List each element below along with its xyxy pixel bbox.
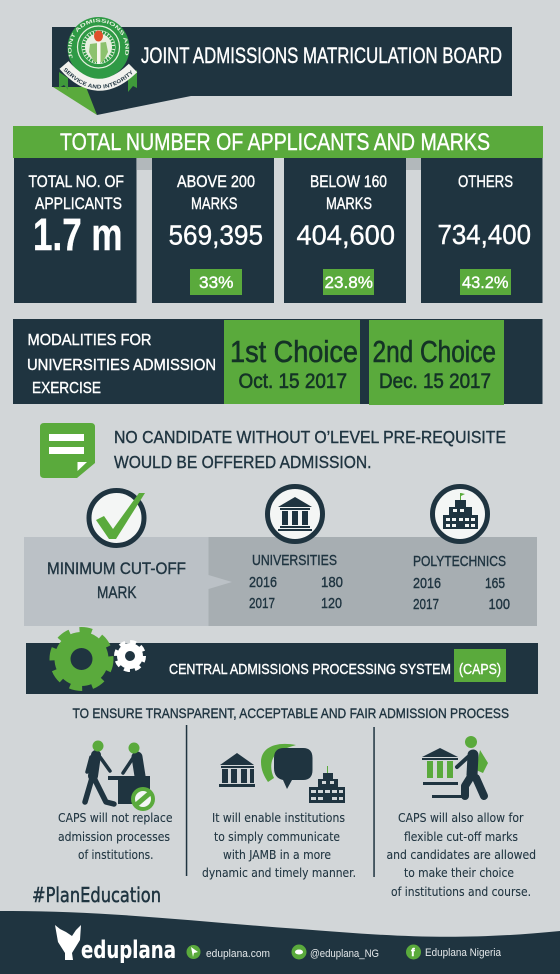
text: flexible cut-off marks: of institutions and course. <box>391 885 531 899</box>
cut-off label: MINIMUM CUT-OFF <box>47 560 186 578</box>
icon: people at desk <box>85 740 155 811</box>
icon: JAMB logo: SERVICE AND INTEGRITY <box>64 68 132 88</box>
first choice: 1st Choice <box>230 334 358 369</box>
icon: eduplana bulb <box>55 925 81 960</box>
panel: minimum cut-off mark <box>24 537 537 626</box>
text: CAPS will not replace: CAPS will not replace <box>58 811 172 825</box>
website: eduplana.com <box>206 948 270 960</box>
icon: JAMB logo <box>59 17 138 92</box>
stat: above 200 marks: ABOVE 200 <box>177 173 255 191</box>
stat: below 160 marks: 404,600 <box>296 220 395 250</box>
CAPS heading: CENTRAL ADMISSIONS PROCESSING SYSTEM <box>169 662 451 678</box>
panel: total number of applicants and marks <box>13 126 543 303</box>
icon: student and institution <box>422 736 488 798</box>
universities marks <box>249 553 343 612</box>
notice text: NO CANDIDATE WITHOUT O’LEVEL PRE-REQUISITE <box>114 427 506 447</box>
icon: university <box>268 486 322 542</box>
stat: above 200 marks: 569,395 <box>168 220 263 250</box>
universities marks: 180 <box>321 575 343 591</box>
universities marks: 2016 <box>249 575 277 591</box>
stat: others: OTHERS <box>458 173 513 191</box>
stat: total applicants: TOTAL NO. OF <box>28 173 124 191</box>
text: enable institutions: to simply communicate <box>214 830 340 844</box>
facebook: f <box>411 947 415 959</box>
facebook <box>406 944 502 960</box>
speech bubbles <box>261 744 312 789</box>
text: enable institutions: dynamic and timely manner. <box>202 866 356 880</box>
icon: polytechnic <box>432 486 488 542</box>
polytechnics marks: 2017 <box>413 597 439 613</box>
modalities text: UNIVERSITIES ADMISSION <box>27 357 216 374</box>
icon: green gear <box>52 630 110 688</box>
stat: above 200 marks: MARKS <box>191 195 238 213</box>
text: enable institutions: with JAMB in a more <box>223 848 331 862</box>
stat: below 160 marks: 23.8% <box>324 273 373 292</box>
text: flexible cut-off marks: to make their choice <box>404 866 514 880</box>
notice text: WOULD BE OFFERED ADMISSION. <box>114 452 372 472</box>
school <box>309 766 345 803</box>
polytechnics marks: 100 <box>488 597 510 613</box>
cut-off label: MARK <box>97 584 136 602</box>
modalities text <box>27 332 216 397</box>
twitter: @eduplana_NG <box>310 948 379 960</box>
icon: check mark <box>89 490 145 546</box>
stat: below 160 marks <box>284 158 406 303</box>
icon: note <box>40 423 95 478</box>
stat: others: 734,400 <box>438 219 531 250</box>
hashtag: #PlanEducation <box>32 883 161 907</box>
stat: above 200 marks <box>152 158 274 303</box>
stat: others <box>421 158 542 303</box>
text: flexible cut-off marks: and candidates are allowed <box>386 848 536 862</box>
stat: above 200 marks: 33% <box>199 273 234 292</box>
text: CAPS will not replace: of institutions. <box>78 848 154 862</box>
stat: below 160 marks: BELOW 160 <box>310 173 387 191</box>
text: CAPS will not replace: admission processes <box>58 830 170 844</box>
universities marks: 2017 <box>249 596 275 612</box>
universities marks: UNIVERSITIES <box>252 553 337 569</box>
eduplana wordmark: eduplana <box>81 936 176 964</box>
CAPS badge <box>454 649 506 682</box>
polytechnics marks: 165 <box>485 576 505 592</box>
footer <box>0 911 560 974</box>
first choice: Oct. 15 2017 <box>238 370 347 393</box>
text: CAPS will not replace <box>58 811 172 862</box>
cut-off label <box>47 560 186 602</box>
icon: communication <box>219 744 345 803</box>
stat: total applicants: APPLICANTS <box>35 195 122 213</box>
text: flexible cut-off marks: flexible cut-off marks <box>404 830 518 844</box>
website <box>186 945 270 960</box>
CAPS badge: (CAPS) <box>459 661 501 678</box>
polytechnics marks: POLYTECHNICS <box>413 554 506 570</box>
polytechnics marks: 2016 <box>413 576 441 592</box>
modalities text: MODALITIES FOR <box>28 332 152 349</box>
modalities text: EXERCISE <box>32 380 101 397</box>
stat: total applicants <box>14 158 136 303</box>
first choice <box>224 320 360 404</box>
stat: others: 43.2% <box>462 273 508 292</box>
polytechnics marks <box>413 554 510 613</box>
notice text <box>114 427 506 472</box>
header banner <box>52 17 512 115</box>
text: enable institutions: It will enable institutions <box>212 811 345 825</box>
icon: white gear <box>116 642 144 670</box>
text: flexible cut-off marks <box>386 811 536 899</box>
panel: modalities <box>13 319 542 405</box>
stat: below 160 marks: MARKS <box>326 195 372 213</box>
universities marks: 120 <box>321 596 342 612</box>
twitter <box>292 944 379 960</box>
second choice: Dec. 15 2017 <box>379 370 491 393</box>
icon: JAMB logo: JOINT ADMISSIONS AND <box>68 18 129 58</box>
bank <box>219 753 255 787</box>
second choice: 2nd Choice <box>372 334 496 369</box>
text: enable institutions <box>202 811 356 880</box>
panel: CAPS banner <box>26 630 538 694</box>
text: flexible cut-off marks: CAPS will also allow for <box>398 811 524 825</box>
stat: total applicants: 1.7 m <box>33 209 122 260</box>
second choice <box>369 320 504 405</box>
facebook: Eduplana Nigeria <box>425 947 502 959</box>
